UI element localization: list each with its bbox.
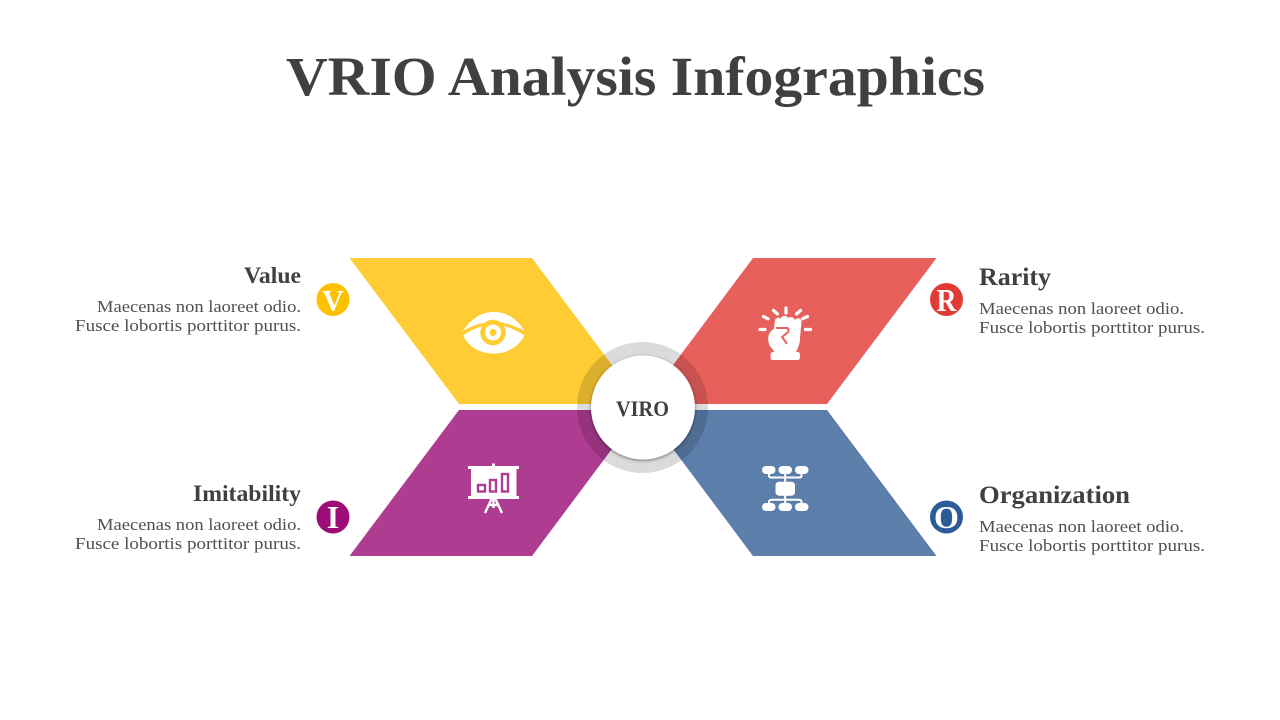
heading: imitability: Imitability — [193, 481, 302, 506]
block: value text — [75, 263, 301, 335]
text: organization description: Maecenas non laoreet odio. — [979, 517, 1184, 536]
heading: organization: Organization — [979, 482, 1130, 509]
center hub — [577, 342, 708, 473]
text: rarity description: Fusce lobortis porttitor purus. — [979, 318, 1205, 337]
hub ring — [577, 342, 708, 473]
organization parallelogram — [644, 410, 936, 556]
icon: eye — [463, 312, 524, 354]
text: organization description — [979, 517, 1205, 555]
badge: I — [316, 499, 350, 535]
block: rarity text — [979, 264, 1205, 337]
badge: O: O — [934, 499, 959, 535]
heading: rarity: Rarity — [979, 264, 1052, 291]
badge: V — [316, 283, 350, 318]
hub circle — [591, 356, 695, 460]
panel: value — [350, 258, 641, 404]
text: value description: Fusce lobortis porttitor purus. — [75, 316, 301, 335]
text: rarity description — [979, 299, 1205, 337]
badge: I: I — [327, 499, 339, 535]
text: rarity description: Maecenas non laoreet odio. — [979, 299, 1184, 318]
text: imitability description: Maecenas non laoreet odio. — [97, 515, 301, 534]
value parallelogram — [350, 258, 641, 404]
badge: R: R — [936, 282, 957, 318]
rarity parallelogram — [644, 258, 936, 404]
title: VRIO Analysis Infographics — [286, 46, 985, 107]
block: organization text — [979, 482, 1205, 555]
text: value description — [75, 297, 301, 335]
text: imitability description — [75, 515, 301, 553]
icon: raised fist — [760, 308, 810, 360]
icon: organization chart — [762, 466, 808, 511]
panel: organization — [644, 410, 936, 556]
text: imitability description: Fusce lobortis porttitor purus. — [75, 534, 301, 553]
panel: imitability — [350, 410, 641, 556]
hub label: VIRO — [616, 396, 669, 421]
imitability parallelogram — [350, 410, 641, 556]
icon: presentation board — [468, 464, 519, 513]
heading: value: Value — [244, 263, 301, 288]
panel: rarity — [644, 258, 936, 404]
block: imitability text — [75, 481, 302, 553]
badge: V: V — [322, 284, 344, 318]
text: value description: Maecenas non laoreet odio. — [97, 297, 301, 316]
text: organization description: Fusce lobortis porttitor purus. — [979, 536, 1205, 555]
